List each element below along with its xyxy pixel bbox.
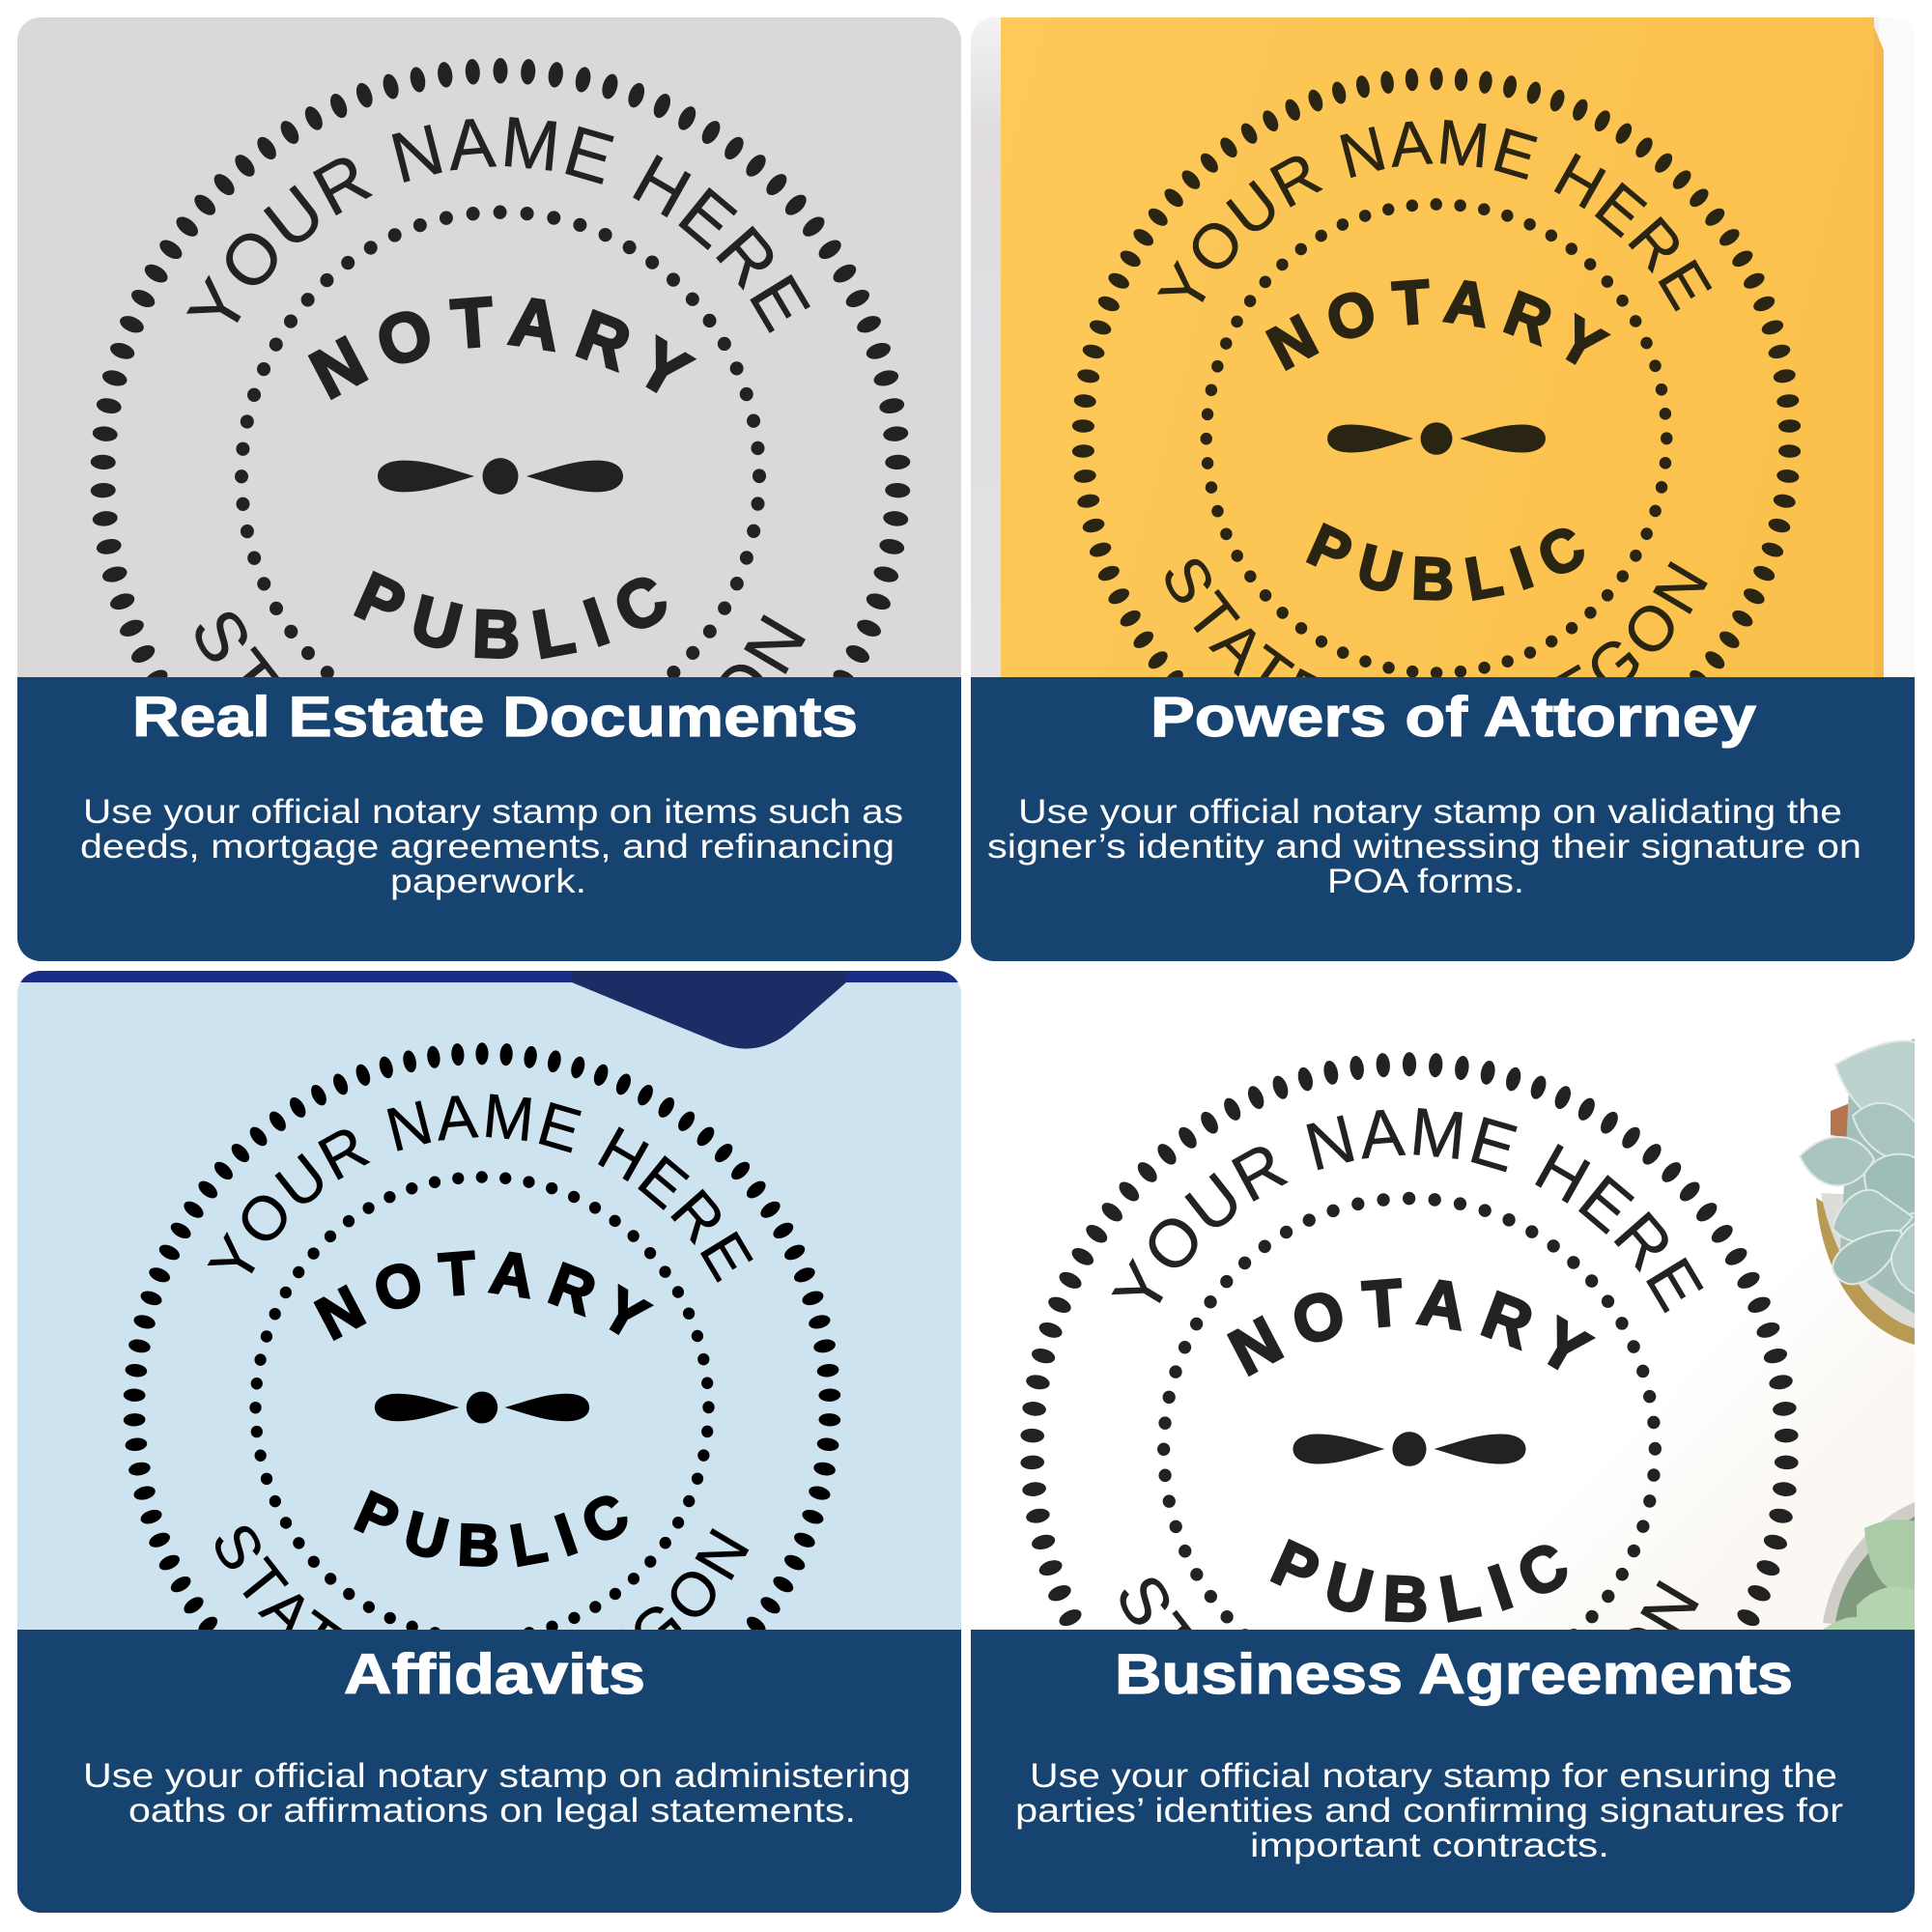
stamp impression: YOUR NAME HERE bbox=[185, 117, 810, 333]
description text: Use your official notary stamp for ensuring the bbox=[1030, 1757, 1837, 1795]
stamp impression: YOUR NAME HERE bbox=[1157, 120, 1712, 311]
stamp impression bbox=[91, 58, 910, 677]
description text bbox=[988, 798, 1859, 893]
photo background: light blue envelope bbox=[17, 971, 961, 1913]
stamp impression: NOTARY bbox=[313, 1250, 654, 1341]
stamp impression: NOTARY bbox=[1265, 278, 1611, 371]
description text: Use your official notary stamp on items such as bbox=[83, 793, 903, 831]
description text: oaths or affirmations on legal statements. bbox=[128, 1792, 856, 1830]
description text: POA forms. bbox=[1327, 863, 1524, 900]
caption band bbox=[17, 677, 961, 961]
stamp impression: YOUR NAME HERE bbox=[207, 1094, 753, 1283]
photo background: grey paper bbox=[17, 17, 961, 961]
stamp impression: STATE OF OREGON bbox=[1121, 1578, 1699, 1630]
stamp impression bbox=[124, 1042, 840, 1630]
description text: signer’s identity and witnessing their signature on bbox=[987, 828, 1861, 866]
stamp impression bbox=[1020, 1052, 1799, 1630]
description text: important contracts. bbox=[1250, 1827, 1609, 1864]
panel: business agreements bbox=[971, 1038, 1915, 1913]
stamp impression: PUBLIC bbox=[1269, 1538, 1567, 1623]
heading: Real Estate Documents bbox=[132, 686, 858, 749]
icon: succulent top right bbox=[1800, 1038, 1918, 1345]
stamp impression: PUBLIC bbox=[354, 1490, 628, 1567]
stamp impression: NOTARY bbox=[307, 296, 697, 400]
description text: deeds, mortgage agreements, and refinancing bbox=[80, 828, 895, 866]
heading: Business Agreements bbox=[1115, 1643, 1793, 1706]
description text: paperwork. bbox=[390, 863, 586, 900]
description text bbox=[1015, 1757, 1843, 1864]
stamp impression: STATE OF OREGON bbox=[214, 1526, 750, 1630]
description text: Use your official notary stamp on administering bbox=[83, 1757, 911, 1795]
stamp impression: YOUR NAME HERE bbox=[1111, 1108, 1704, 1314]
caption band bbox=[17, 1630, 961, 1915]
stamp impression: PUBLIC bbox=[354, 570, 667, 659]
photo background: yellow note pad bbox=[971, 17, 1884, 677]
stamp impression: NOTARY bbox=[1227, 1277, 1596, 1378]
stamp impression: STATE OF OREGON bbox=[195, 612, 806, 677]
heading: Powers of Attorney bbox=[1151, 686, 1756, 749]
stamp impression bbox=[1072, 68, 1801, 677]
photo background: white desk bbox=[1586, 1329, 1915, 1630]
caption band bbox=[971, 1630, 1915, 1915]
description text: Use your official notary stamp on validating the bbox=[1018, 793, 1842, 831]
stamp impression: PUBLIC bbox=[1306, 522, 1584, 601]
description text bbox=[83, 1757, 911, 1830]
panel: affidavits bbox=[17, 971, 961, 1913]
panel: real estate documents bbox=[17, 17, 961, 961]
icon: succulent bottom right bbox=[1818, 1502, 1918, 1633]
description text: parties’ identities and confirming signatures for bbox=[1015, 1792, 1843, 1830]
panel: powers of attorney bbox=[971, 17, 1915, 961]
description text bbox=[80, 793, 903, 900]
stamp impression: STATE OF OREGON bbox=[1165, 558, 1708, 677]
heading: Affidavits bbox=[344, 1643, 645, 1706]
caption band bbox=[971, 677, 1915, 961]
